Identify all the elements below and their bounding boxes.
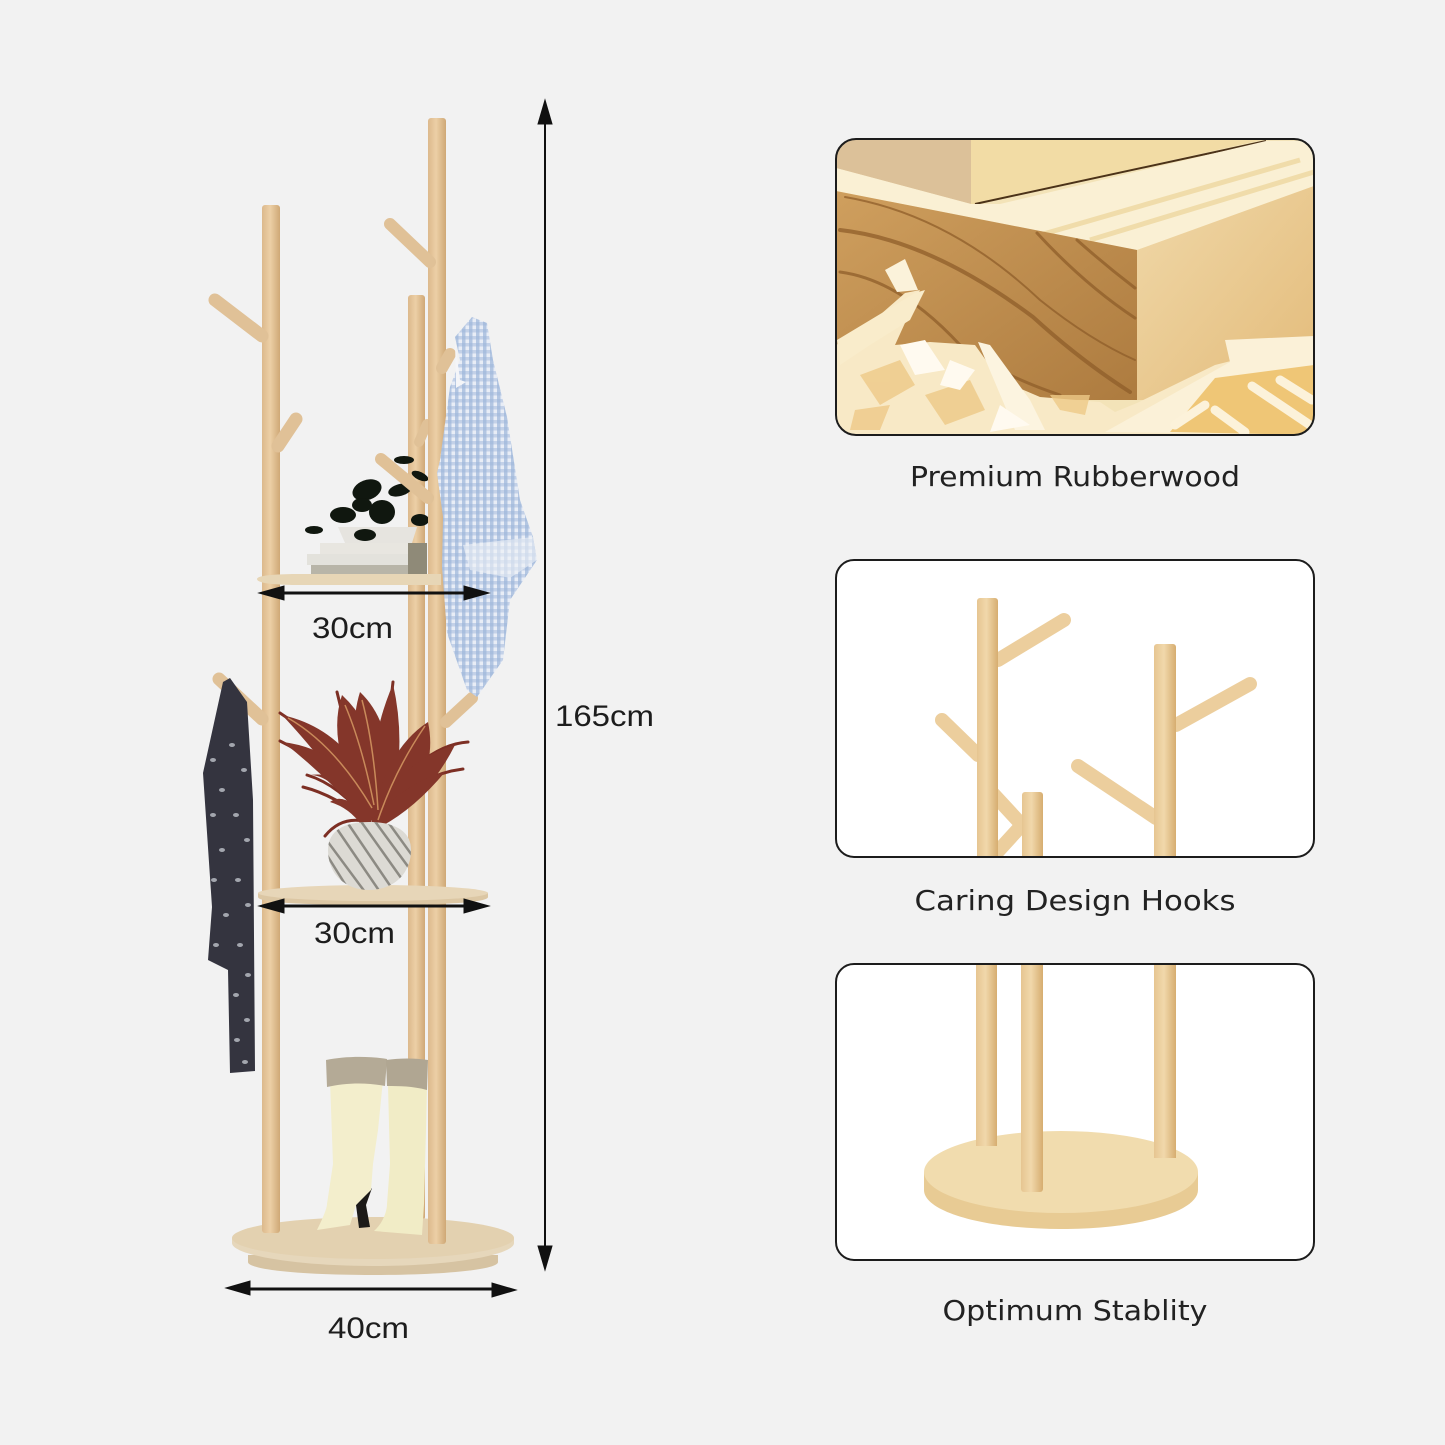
label: 165cm: 165cm [555, 700, 654, 733]
front right pole [428, 118, 446, 1244]
base width arrow [226, 1281, 516, 1297]
upper shelf width arrow [259, 586, 489, 600]
wood grain [840, 197, 1135, 395]
lower block left face [836, 191, 1137, 400]
left pole [262, 205, 280, 1233]
label: upper shelf 30cm: 30cm [312, 612, 393, 645]
lower shelf [258, 885, 488, 905]
right boot [374, 1085, 427, 1235]
lower shelf width arrow [259, 899, 489, 913]
panel: premium rubberwood photo [836, 139, 1314, 435]
boot cuffs [326, 1057, 387, 1087]
hooks on back pole [419, 424, 427, 442]
label: lower shelf 30cm: 30cm [314, 917, 395, 950]
height dimension arrow [538, 100, 552, 1270]
boots [317, 1057, 428, 1235]
hook poles [977, 598, 998, 868]
lower block right face [1137, 186, 1314, 400]
caption: caring design hooks: Caring Design Hooks [914, 884, 1236, 917]
coat rack product illustration [203, 118, 537, 1275]
support poles [976, 960, 997, 1146]
back pole [408, 295, 425, 1220]
scarf [203, 678, 255, 1073]
panel: optimum stability [836, 960, 1314, 1260]
hooks on left pole [215, 300, 296, 719]
caption: premium rubberwood: Premium Rubberwood [910, 460, 1240, 493]
label: 40cm: 40cm [328, 1312, 409, 1345]
caption: caring design hooks end: Optimum Stablity [942, 1294, 1208, 1327]
round base [924, 1172, 1198, 1229]
upper shelf [257, 574, 441, 585]
wood shavings left [837, 290, 1230, 434]
wood shavings right [1105, 336, 1314, 435]
lower block top surface [836, 141, 1314, 250]
left boot heel [356, 1188, 372, 1228]
hanging shirt [437, 317, 537, 697]
hooks on right pole [381, 224, 472, 722]
hook branches [942, 620, 1250, 860]
books [307, 543, 427, 574]
base [232, 1217, 514, 1275]
panel: caring design hooks [836, 560, 1314, 872]
small green plant with white bowl [305, 456, 430, 543]
red potted plant [280, 682, 468, 892]
left boot [317, 1080, 383, 1230]
upper block faces [836, 139, 971, 204]
